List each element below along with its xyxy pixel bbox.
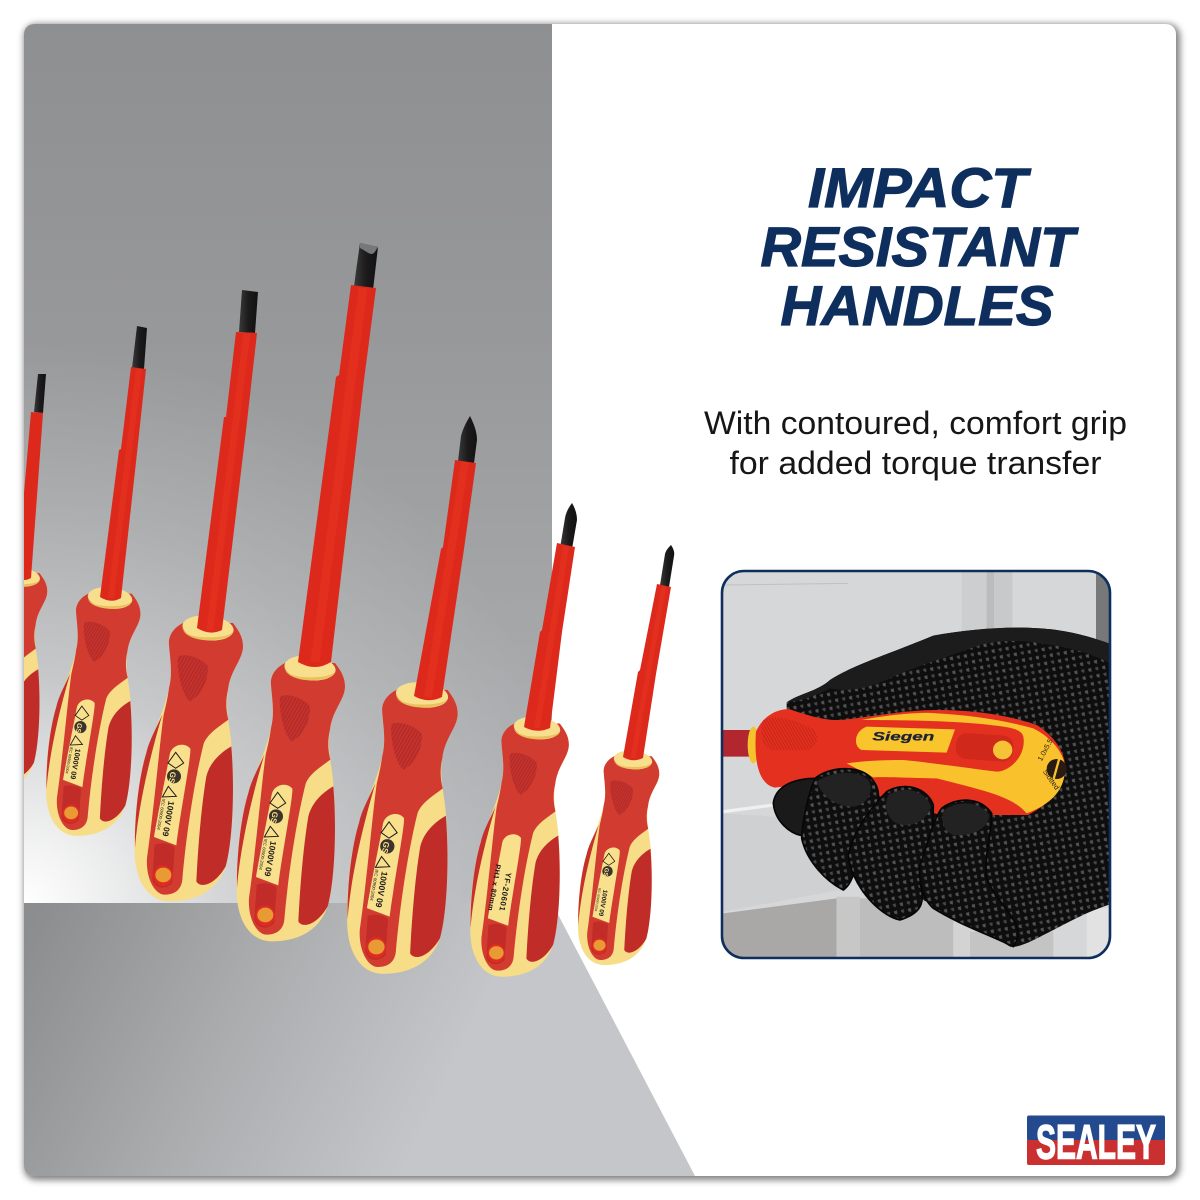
handle label 2 — [65, 706, 89, 780]
screwdriver 7 — [578, 545, 674, 965]
handle body — [756, 709, 1067, 815]
handle body: Slotted — [1041, 768, 1061, 792]
description text: for added torque transfer — [730, 445, 1102, 481]
handle label 3: GS — [167, 771, 178, 785]
handle label 2: IEC 60900:2004 — [65, 746, 73, 774]
screwdriver 3 — [135, 290, 258, 901]
title — [760, 156, 1079, 337]
glove cuff sheen — [787, 628, 1113, 702]
title: RESISTANT — [760, 215, 1079, 278]
handle label 3 — [156, 752, 184, 838]
panel: product photo backdrop — [24, 24, 695, 1176]
screwdriver 4 — [237, 243, 378, 941]
backdrop light glow — [24, 446, 450, 903]
handle label 3: IEC 60900:2004 — [156, 798, 166, 831]
handle collar — [748, 726, 757, 764]
handle label 7: IEC 60900:2004 — [594, 888, 602, 912]
description text — [704, 405, 1127, 481]
handle label 3: 1000V 09 — [160, 800, 177, 838]
handle label 7 — [594, 853, 615, 917]
handle label 4 — [258, 792, 286, 878]
handle body: 1.0x5.5 — [1035, 737, 1055, 763]
title: HANDLES — [780, 274, 1054, 337]
handle label 5: GS — [380, 841, 391, 855]
handle label 6 — [488, 864, 512, 910]
screwdriver 5 — [347, 416, 477, 974]
handle label 4: IEC 60900:2004 — [258, 838, 268, 871]
handle label 7: 1000V 09 — [597, 889, 608, 917]
inset photo: gloved hand gripping screwdriver — [720, 565, 1120, 965]
title: IMPACT — [808, 156, 1032, 219]
handle body: Siegen — [872, 730, 935, 744]
handle label 6: YF-20601 — [497, 872, 513, 912]
backdrop wall — [24, 24, 552, 903]
screwdriver 2 — [46, 326, 147, 836]
backdrop floor — [24, 903, 695, 1176]
product: seven VDE screwdrivers — [0, 243, 674, 977]
glove fingers — [773, 769, 1018, 947]
handle label 4: 1000V 09 — [262, 840, 279, 878]
handle label 5 — [369, 822, 397, 909]
handle label 6: PH1 x 80mm — [486, 864, 503, 912]
handle label 7: GS — [602, 867, 609, 877]
handle label 5: IEC 60900:2004 — [369, 869, 379, 902]
screwdriver 6 — [470, 503, 577, 977]
finger highlights — [817, 773, 989, 835]
handle label 2: GS — [74, 722, 82, 734]
glove back of hand — [787, 628, 1113, 947]
handle label 2: 1000V 09 — [68, 748, 83, 780]
screwdriver 1 — [24, 374, 48, 778]
handle label 4: GS — [269, 811, 280, 825]
inset photo border — [722, 571, 1110, 958]
handle label 5: 1000V 09 — [374, 871, 390, 909]
hand-held screwdriver shaft — [723, 730, 750, 757]
description text: With contoured, comfort grip — [704, 405, 1127, 441]
photo door background — [720, 565, 1120, 965]
